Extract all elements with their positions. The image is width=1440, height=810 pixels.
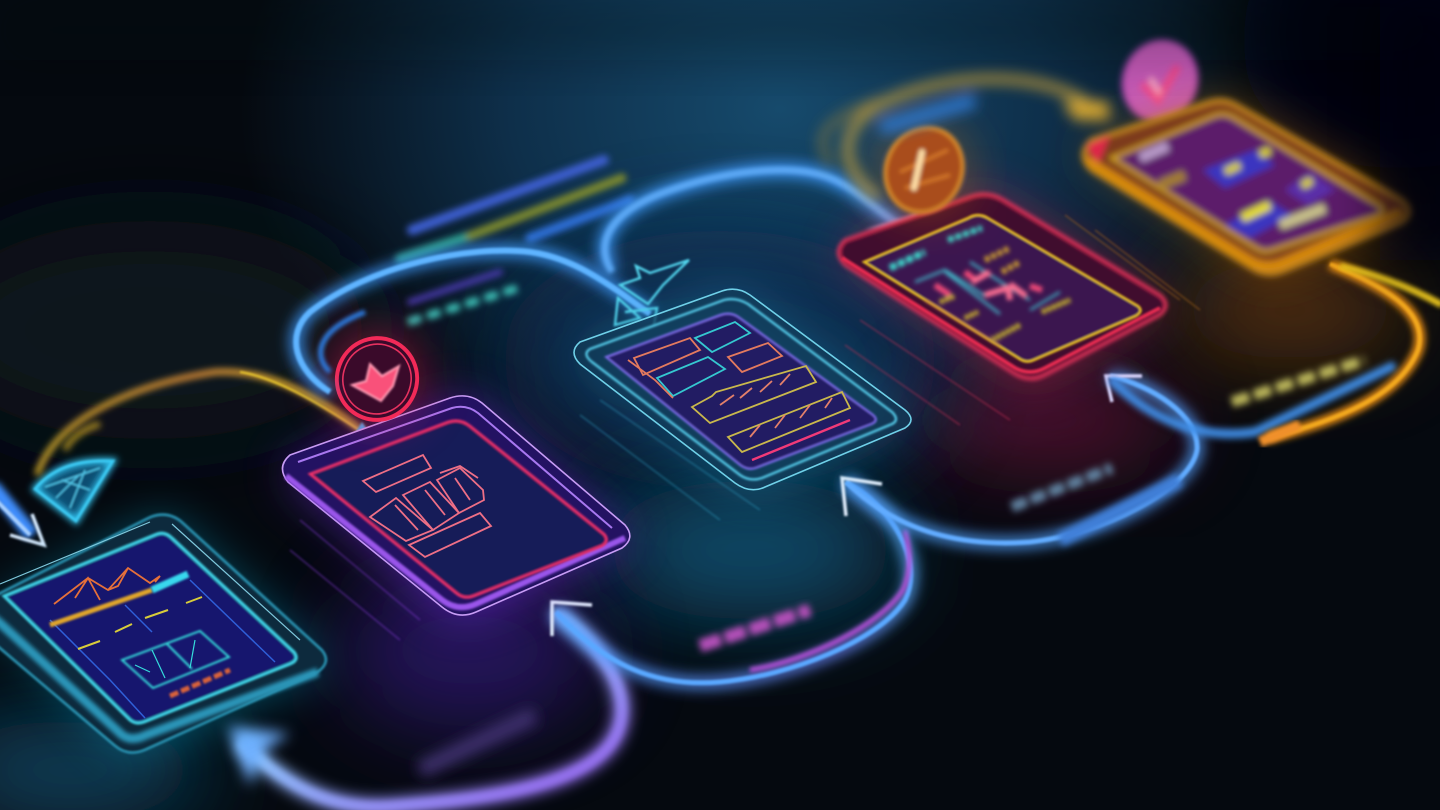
panel 4: red	[838, 192, 1168, 382]
icon: star arrowhead	[615, 260, 689, 325]
panel 1 header band	[50, 590, 152, 625]
panel 5: orange	[1082, 98, 1410, 275]
panel 2: purple	[282, 395, 632, 618]
vignette	[0, 0, 1440, 260]
arrow: loop from panel 2 to panel 3	[420, 482, 911, 770]
icon: pink badge	[1111, 30, 1209, 132]
arrow: loop from panel 4 to panel 5	[1110, 264, 1440, 442]
arrow: blue arc from panel 2 to panel 3	[296, 251, 650, 392]
arrow: panel 1 incoming top-left	[0, 486, 44, 545]
panel 4 contents	[890, 228, 1070, 345]
panel 3: cyan	[573, 288, 913, 492]
panel 1 screen	[4, 533, 296, 723]
panel 1 icon frames	[122, 631, 229, 688]
background label bars, top center	[400, 160, 630, 322]
panel 3 screen	[606, 314, 876, 469]
panel 5 contents	[1140, 146, 1335, 238]
panel 2 sketch: reels	[363, 455, 491, 557]
panel 3 rows	[628, 322, 850, 460]
motion streaks under panels	[290, 215, 1200, 640]
panel 5 screen	[1112, 114, 1382, 251]
arrow: blue arc from panel 3 to panel 4	[605, 170, 918, 272]
icon: fan	[35, 461, 113, 521]
panel 2 screen	[310, 421, 607, 597]
icon: red crown badge	[325, 327, 429, 431]
panel 1: cyan	[0, 514, 328, 755]
icon: orange badge	[873, 116, 975, 224]
arrow: loop from panel 3 to panel 4	[842, 376, 1197, 543]
panel 4 screen	[864, 215, 1141, 362]
panel 1 sketch house	[54, 568, 160, 604]
arrow: yellow arc from panel 4 to panel 5	[822, 79, 1110, 198]
arrow: bottom loop into panel 1	[228, 612, 622, 807]
arrow: yellow arc from panel 1 to panel 2	[37, 372, 374, 475]
